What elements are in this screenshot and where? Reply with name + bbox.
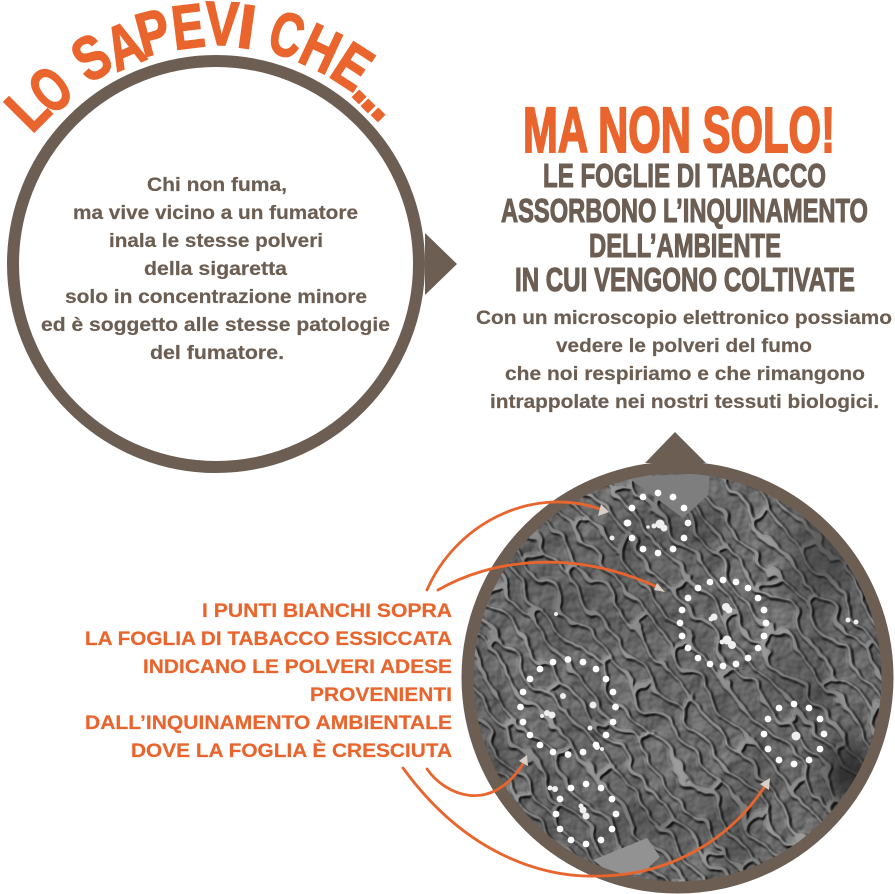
title: lo sapevi che: .: [349, 64, 410, 125]
text block: left circle: della sigaretta: [144, 258, 287, 280]
frame: right circle outline: [468, 468, 888, 888]
title: lo sapevi che: .: [359, 73, 420, 134]
callout text: orange caption: [85, 600, 452, 762]
callout text: orange caption: PROVENIENTI: [310, 684, 452, 706]
subheading: le foglie di tabacco: DELL’AMBIENTE: [589, 227, 781, 264]
text block: left circle: solo in concentrazione minore: [65, 286, 367, 308]
arrow: right pointing triangle: [425, 233, 457, 295]
text block: left circle: ed è soggetto alle stesse patologie: [41, 314, 390, 336]
panel: left circle outline: [13, 61, 419, 467]
callout text: orange caption: DOVE LA FOGLIA È CRESCIUTA: [131, 739, 452, 762]
title: lo sapevi che: O: [16, 53, 86, 127]
title: lo sapevi che: E: [320, 29, 385, 104]
title: lo sapevi che: H: [290, 10, 351, 87]
callout text: orange caption: INDICANO LE POLVERI ADESE: [143, 656, 452, 678]
dust: white particles: [540, 520, 858, 820]
title: lo sapevi che: [0, 0, 420, 145]
text block: microscope: intrappolate nei nostri tessuti biologici.: [490, 391, 879, 413]
leader arrows: orange curves: [403, 502, 770, 876]
text block: left circle: del fumatore.: [150, 342, 284, 364]
arrow: up pointing triangle: [645, 432, 706, 463]
title: lo sapevi che: .: [340, 55, 401, 116]
text block: microscope: che noi respiriamo e che rimangono: [505, 363, 865, 385]
text block: left circle: ma vive vicino a un fumatore: [73, 202, 358, 224]
callout text: orange caption: DALL’INQUINAMENTO AMBIENTALE: [85, 712, 452, 734]
text block: left circle: inala le stesse polveri: [109, 230, 323, 252]
title: lo sapevi che: S: [60, 20, 123, 96]
image: tobacco leaf micrograph: [470, 470, 886, 886]
text block: left circle: Chi non fuma,: [147, 174, 287, 196]
text block: microscope: vedere le polveri del fumo: [556, 335, 812, 357]
subheading: le foglie di tabacco: [501, 157, 868, 298]
callout text: orange caption: I PUNTI BIANCHI SOPRA: [202, 600, 452, 622]
text block: left circle: [41, 174, 390, 364]
text block: microscope: Con un microscopio elettronico possiamo: [476, 307, 892, 329]
callout text: orange caption: LA FOGLIA DI TABACCO ESSICCATA: [85, 628, 452, 650]
text block: microscope: [476, 307, 892, 413]
dotted rings: highlighted dust: [517, 490, 827, 847]
title: lo sapevi che: A: [95, 7, 154, 84]
